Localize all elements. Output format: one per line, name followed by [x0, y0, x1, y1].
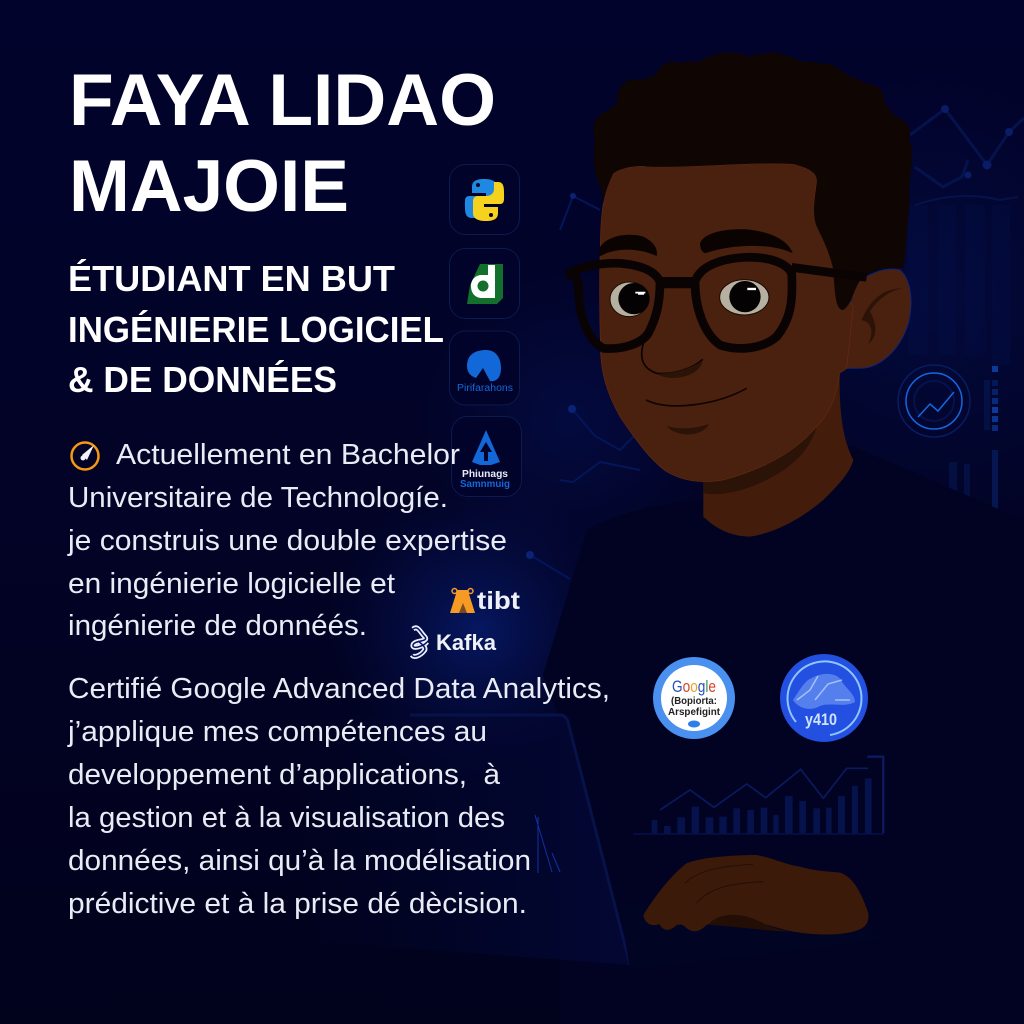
subtitle: ÉTUDIANT EN BUT	[68, 258, 395, 299]
icon box: arrow logo: Samnmuig	[460, 479, 510, 490]
logo: tibt: tibt	[477, 587, 521, 615]
badge: Google Advanced Data Analytics	[653, 657, 735, 739]
paragraph 1: Universitaire de Technologíe.	[68, 482, 448, 514]
paragraph 2: données, ainsi qu’à la modélisation	[68, 845, 531, 877]
ear	[843, 269, 911, 368]
bar chart with trend line	[633, 757, 883, 834]
ear detail	[862, 288, 903, 344]
icon box: d logo	[450, 248, 520, 318]
badge: blue emblem	[780, 654, 868, 742]
paragraph 1: en ingénierie logicielle et	[68, 568, 395, 600]
background chart: top right line graph	[910, 105, 1024, 205]
hair	[593, 52, 912, 310]
left eye	[610, 282, 650, 317]
paragraph 1: Actuellement en Bachelor	[116, 439, 460, 471]
logo: Kafka	[412, 628, 497, 656]
icon: circular chart gauge	[898, 365, 970, 437]
title: FAYA LIDAO	[69, 60, 496, 141]
badge: Google Advanced Data Analytics: Arspefigint	[668, 707, 721, 718]
neck	[703, 367, 853, 537]
subtitle	[68, 258, 444, 400]
paragraph 1: ingénierie de donnéés.	[68, 610, 367, 642]
badge: blue emblem: y410	[805, 710, 837, 729]
paragraph 2: Certifié Google Advanced Data Analytics,	[68, 673, 610, 705]
title: MAJOIE	[69, 146, 349, 227]
subtitle: & DE DONNÉES	[68, 359, 337, 400]
right eye	[720, 280, 769, 315]
person: shirt	[543, 445, 1024, 1024]
badge: Google Advanced Data Analytics: Google	[672, 677, 716, 696]
paragraph 2	[67, 673, 610, 920]
paragraph 2: developpement d’applications, à	[68, 759, 501, 791]
icon box: arrow logo: Phiunags	[462, 469, 508, 480]
paragraph 1: je construis une double expertise	[67, 525, 507, 557]
title	[69, 60, 496, 227]
background columns right	[908, 205, 1010, 365]
person: head portrait	[567, 52, 912, 537]
face	[600, 163, 853, 482]
background chart: left of head	[526, 193, 640, 579]
nose	[642, 338, 703, 374]
level meter squares	[949, 366, 998, 510]
icon: orange gauge	[72, 442, 98, 470]
paragraph 2: j’applique mes compétences au	[67, 716, 487, 748]
icon box: elephant logo: Pirifarahons	[457, 383, 513, 394]
laptop	[300, 715, 880, 970]
lip shadow	[667, 424, 709, 434]
logo: tibt	[450, 587, 521, 615]
paragraph 1	[67, 439, 507, 642]
logo: Kafka: Kafka	[436, 630, 497, 655]
subtitle: INGÉNIERIE LOGICIEL	[68, 309, 444, 350]
person: hand	[643, 855, 868, 935]
neck shadow	[703, 427, 817, 494]
paragraph 2: prédictive et à la prise dé dècision.	[68, 888, 527, 920]
glasses	[567, 257, 867, 349]
nose shadow	[657, 360, 703, 378]
badge: Google Advanced Data Analytics: (Bopiorta:	[671, 696, 717, 707]
icon box: elephant logo	[450, 331, 520, 405]
mouth	[646, 388, 747, 406]
icon box: arrow logo	[452, 416, 522, 496]
eyebrows	[599, 229, 793, 257]
icon box: python	[450, 164, 520, 234]
paragraph 2: la gestion et à la visualisation des	[68, 802, 505, 834]
